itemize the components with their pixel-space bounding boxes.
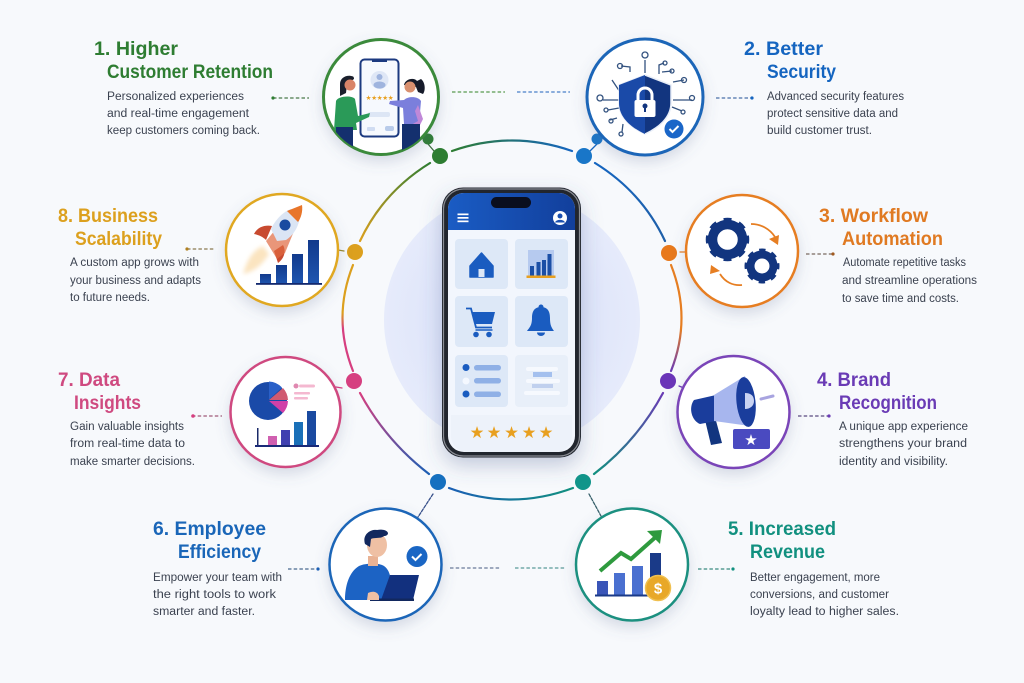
text block 2: Security (767, 61, 836, 83)
rating stars: ★ (470, 424, 485, 442)
badge 2: security shield (587, 39, 703, 155)
badge 4: megaphone: ★ (744, 432, 758, 449)
text block 6: the right tools to work (153, 589, 276, 601)
badge 5: revenue chart (576, 508, 688, 620)
text block 3: Automation (842, 228, 943, 250)
icon: cart (466, 308, 495, 337)
text block 5: conversions, and customer (750, 589, 889, 601)
faded card (524, 367, 560, 395)
badge 1: customers with phone: ★★★★★ (366, 94, 394, 102)
badge 4: megaphone (678, 356, 790, 468)
text block 1: and real-time engagement (107, 108, 250, 120)
rating stars: ★ (504, 424, 519, 442)
text block 6: smarter and faster. (153, 606, 255, 618)
badge 6: employee with laptop (330, 508, 442, 620)
text block 3: Automate repetitive tasks (843, 257, 966, 269)
text block 4: 4. Brand (817, 369, 891, 391)
text block 8: your business and adapts (70, 275, 201, 287)
icon: home (470, 253, 493, 277)
text block 2: Advanced security features (767, 91, 904, 103)
text block 6: Empower your team with (153, 572, 282, 584)
text block 4 (817, 369, 968, 468)
phone mockup (442, 188, 581, 458)
text block 7: 7. Data (58, 369, 120, 391)
rating card (451, 415, 572, 452)
text block 7: Gain valuable insights (70, 421, 184, 433)
text block 6: Efficiency (178, 541, 261, 563)
ring of connected nodes (336, 140, 687, 517)
node dots (346, 134, 677, 490)
icon: bell (527, 304, 554, 336)
woman right (404, 79, 425, 94)
text block 8 (58, 205, 201, 304)
text block 4: Recognition (839, 392, 937, 414)
text block 5: loyalty lead to higher sales. (750, 606, 899, 618)
text block 8: A custom app grows with (70, 257, 199, 269)
text block 5: Revenue (750, 541, 825, 563)
text block 8: Scalability (75, 228, 162, 250)
rating stars: ★ (539, 424, 554, 442)
text block 7: Insights (74, 392, 141, 414)
woman left (340, 76, 354, 96)
text block 2: 2. Better (744, 38, 823, 60)
text block 3 (819, 205, 977, 305)
text block 4: strengthens your brand (839, 438, 967, 450)
text block 4: A unique app experience (839, 421, 968, 433)
app tiles (455, 239, 568, 407)
text block 2: build customer trust. (767, 125, 872, 137)
text block 1: 1. Higher (94, 38, 178, 60)
text block 1: Customer Retention (107, 61, 273, 83)
text block 3: 3. Workflow (819, 205, 929, 227)
text block 1 (94, 38, 273, 137)
central disc (384, 192, 640, 448)
badge 3: workflow gears (686, 195, 798, 307)
icon: chart (526, 250, 556, 278)
rating stars: ★ (487, 424, 502, 442)
rating stars (470, 424, 554, 442)
text block 8: to future needs. (70, 292, 150, 304)
rating stars: ★ (522, 424, 537, 442)
text block 4: identity and visibility. (839, 456, 948, 468)
text block 1: keep customers coming back. (107, 125, 260, 137)
text block 5: 5. Increased (728, 518, 836, 540)
list rows (462, 364, 501, 398)
badge 5: revenue chart: $ (654, 580, 663, 598)
dashed connectors (185, 92, 835, 571)
text block 5 (728, 518, 899, 618)
badge 8: rocket and growth (226, 194, 338, 306)
text block 3: and streamline operations (842, 275, 977, 287)
text block 2: protect sensitive data and (767, 108, 898, 120)
phone header (448, 193, 575, 230)
badge 1: customers with phone (324, 40, 438, 157)
text block 7 (58, 369, 195, 468)
text block 7: make smarter decisions. (70, 456, 195, 468)
badge 7: data insights (230, 357, 340, 467)
text block 7: from real-time data to (70, 438, 185, 450)
text block 8: 8. Business (58, 205, 158, 227)
text block 6 (153, 518, 282, 618)
text block 1: Personalized experiences (107, 91, 244, 103)
text block 6: 6. Employee (153, 518, 266, 540)
text block 5: Better engagement, more (750, 572, 880, 584)
text block 3: to save time and costs. (842, 293, 959, 305)
text block 2 (744, 38, 904, 137)
